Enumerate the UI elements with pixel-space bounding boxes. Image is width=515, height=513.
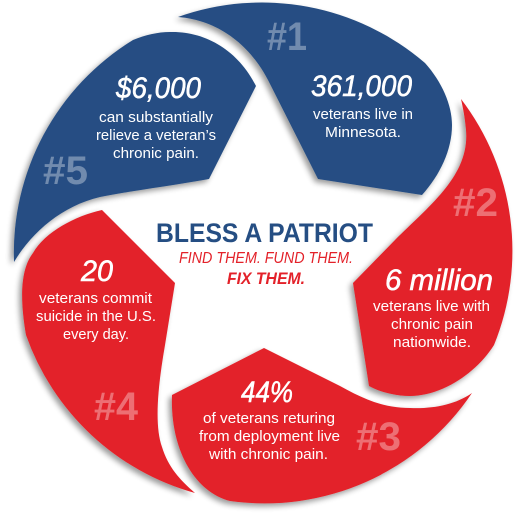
panel #3: 44%	[172, 348, 472, 503]
stat: 20: 20	[80, 255, 113, 288]
stat: $6,000: $6,000	[115, 72, 201, 105]
panel #5: $6,000	[14, 32, 256, 262]
stat: 6 million: 6 million	[385, 264, 493, 297]
text: 361,000 description	[313, 107, 413, 141]
text: 6 million description: chronic pain	[391, 317, 473, 333]
tagline: FIX THEM.	[227, 269, 305, 288]
text: $6,000 description: relieve a veteran’s	[96, 128, 216, 144]
number: #4: #4	[94, 385, 139, 429]
text: 6 million description: nationwide.	[393, 335, 471, 351]
title: BLESS A PATRIOT	[156, 218, 373, 248]
number: #1: #1	[267, 15, 307, 59]
number: #2: #2	[453, 181, 498, 225]
tagline: FIND THEM. FUND THEM.	[179, 250, 353, 267]
tagline	[179, 250, 353, 288]
text: 44% description: of veterans returing	[203, 411, 335, 427]
text: $6,000 description: chronic pain.	[113, 146, 199, 162]
text: 44% description: with chronic pain.	[208, 447, 328, 463]
panel #1: 361,000	[178, 2, 452, 195]
text: $6,000 description	[96, 110, 216, 162]
stat: 361,000: 361,000	[311, 70, 412, 103]
stat: 44%: 44%	[241, 376, 293, 409]
panel #2: 6 million	[353, 99, 512, 396]
text: 361,000 description: Minnesota.	[325, 125, 401, 141]
text: 20 description	[36, 291, 156, 343]
text: 6 million description: veterans live with	[373, 299, 490, 315]
text: 20 description: veterans commit	[39, 291, 152, 307]
text: 44% description	[199, 411, 340, 463]
text: 361,000 description: veterans live in	[313, 107, 413, 123]
number: #3: #3	[356, 415, 401, 459]
text: 44% description: from deployment live	[199, 429, 340, 445]
text: 20 description: every day.	[63, 327, 129, 343]
text: $6,000 description: can substantially	[99, 110, 214, 126]
panel #4: 20	[22, 210, 195, 493]
number: #5: #5	[43, 149, 88, 193]
text: 6 million description	[373, 299, 490, 351]
text: 20 description: suicide in the U.S.	[36, 309, 156, 325]
